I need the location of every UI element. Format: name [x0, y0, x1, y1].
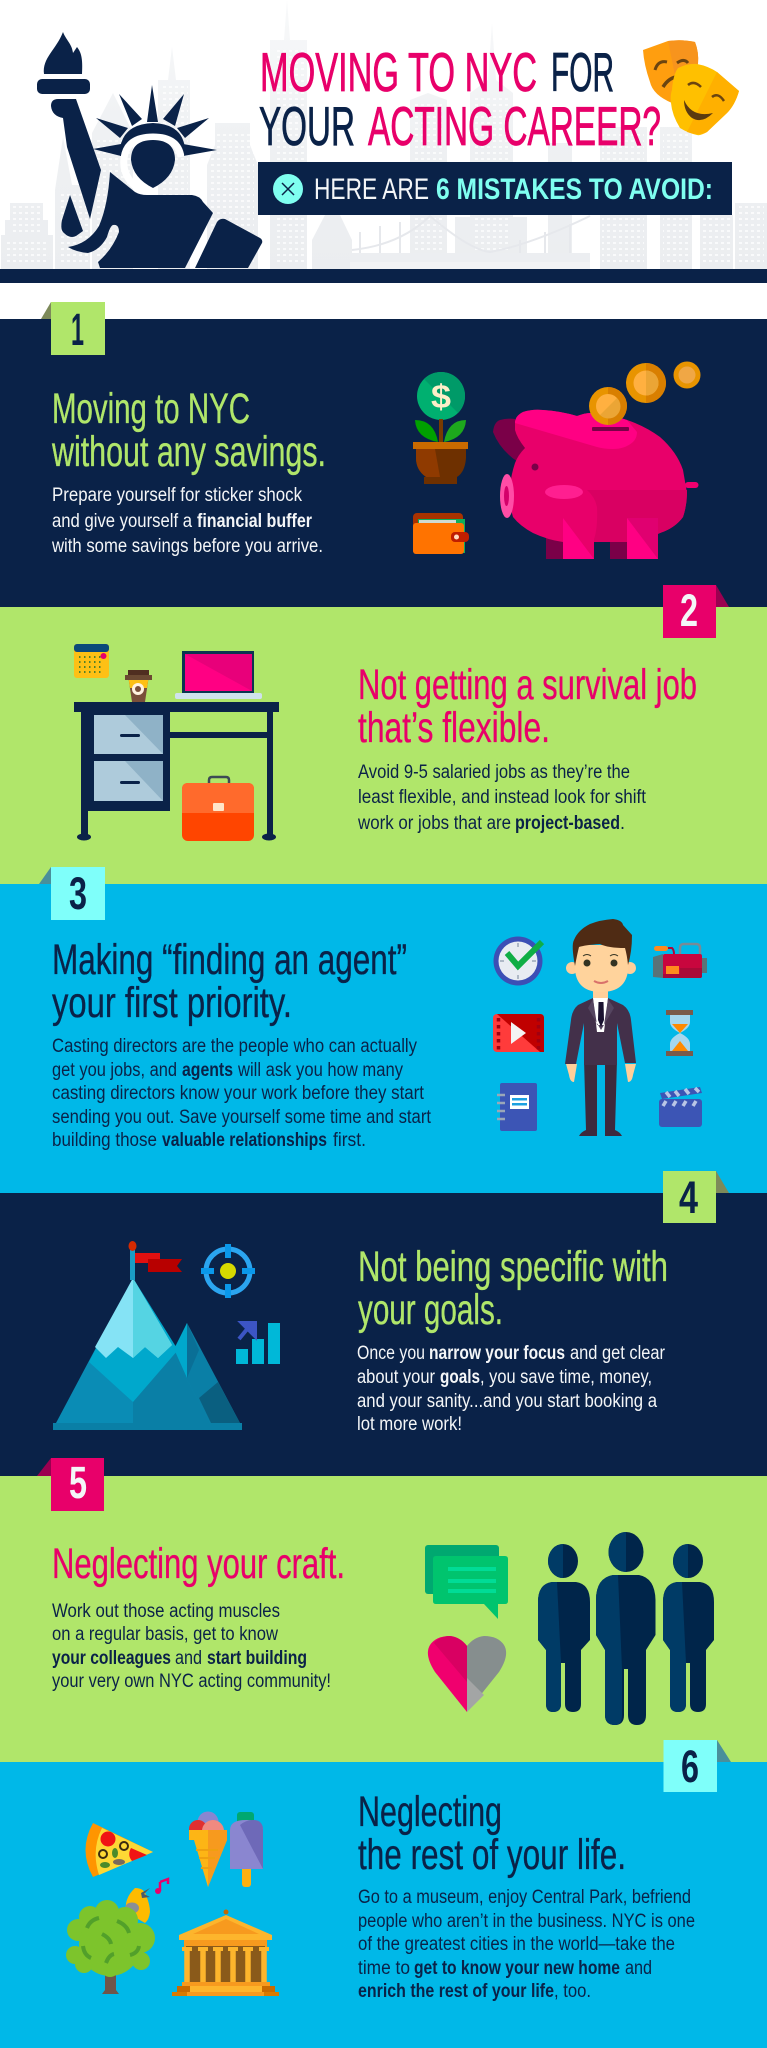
panel: mistake 4: [0, 1171, 767, 1476]
badge 1: 1: [71, 304, 84, 355]
badge 3: 3: [69, 868, 87, 919]
icon: briefcase: [182, 777, 254, 841]
badge 3: [39, 867, 105, 920]
body 3: get you jobs, and: [52, 1060, 177, 1081]
banner text: [314, 173, 713, 206]
badge 4: [663, 1171, 729, 1223]
title: YOUR: [259, 95, 355, 157]
body 6: people who aren’t in the business. NYC is one: [358, 1911, 695, 1932]
heading 1: Moving to NYC: [52, 385, 250, 433]
icon: money plant: $: [431, 378, 451, 415]
icon: ice cream cone: [189, 1812, 227, 1887]
icon: camera: [653, 944, 707, 978]
badge 6: 6: [681, 1741, 699, 1792]
body 5: on a regular basis, get to know: [52, 1624, 278, 1645]
body 3: first.: [333, 1130, 366, 1151]
icon: coffee cup: [125, 670, 152, 702]
banner text: 6 MISTAKES TO AVOID:: [436, 173, 713, 206]
statue of liberty: [37, 32, 262, 268]
body 2: least flexible, and instead look for shift: [358, 787, 647, 808]
heading 2: that’s flexible.: [358, 704, 550, 752]
body 4: [357, 1343, 666, 1435]
heading 4: [358, 1243, 668, 1334]
heading 3: [52, 936, 407, 1027]
icon: tree: [66, 1900, 155, 1994]
icon: clapperboard: [659, 1087, 702, 1127]
body 4: , you save time, money,: [480, 1367, 652, 1388]
icon: notebook: [497, 1083, 537, 1131]
heading 3: Making “finding an agent”: [52, 936, 407, 984]
body 4: Once you: [357, 1343, 425, 1364]
heading 2: [358, 661, 697, 752]
badge 5: 5: [69, 1457, 87, 1508]
body 3: [52, 1036, 432, 1151]
body 5: and: [175, 1648, 202, 1669]
title: [259, 41, 661, 157]
icon: video player: [493, 1014, 544, 1052]
icon: pizza slice: [86, 1823, 153, 1877]
badge 2: [663, 585, 729, 638]
icon: museum: [172, 1910, 279, 1996]
skyline: [1, 0, 767, 269]
heading 3: your first priority.: [52, 979, 292, 1027]
body 4: narrow your focus: [429, 1343, 565, 1364]
banner: [258, 162, 732, 215]
header bar: [0, 269, 767, 283]
body 1: with some savings before you arrive.: [51, 536, 323, 557]
icon: target: [201, 1244, 255, 1298]
body 6: of the greatest cities in the world—take the: [358, 1934, 675, 1955]
body 4: about your: [357, 1367, 436, 1388]
panel: mistake 6: [0, 1740, 767, 2048]
body 1: and give yourself a: [52, 511, 192, 532]
icon: desk: [74, 702, 279, 840]
body 3: sending you out. Save yourself some time and start: [52, 1107, 432, 1128]
body 2: work or jobs that are: [357, 813, 511, 834]
body 4: goals: [440, 1367, 480, 1388]
body 6: [358, 1887, 695, 2002]
body 3: building those: [52, 1130, 157, 1151]
body 3: Casting directors are the people who can actually: [52, 1036, 417, 1057]
icon: singing bird: [125, 1879, 168, 1923]
panel: mistake 5: [0, 1457, 767, 1762]
icon: heart: [428, 1636, 506, 1712]
heading 1: without any savings.: [51, 428, 326, 476]
body 2: [357, 762, 647, 834]
banner text: HERE ARE: [314, 173, 429, 206]
body 2: Avoid 9-5 salaried jobs as they’re the: [358, 762, 630, 783]
body 6: time to: [358, 1958, 410, 1979]
heading 6: the rest of your life.: [358, 1831, 626, 1879]
icon: clock with check: [494, 936, 542, 986]
header: [0, 0, 767, 284]
body 6: and: [625, 1958, 652, 1979]
body 4: and your sanity...and you start booking a: [357, 1391, 657, 1412]
icon: laptop: [175, 651, 262, 699]
icon: three people: [538, 1532, 714, 1725]
icon: theatre masks: [643, 40, 739, 135]
body 4: lot more work!: [357, 1414, 462, 1435]
body 3: casting directors know your work before they start: [52, 1083, 425, 1104]
icon: growth chart: [236, 1323, 280, 1364]
body 6: get to know your new home: [414, 1958, 620, 1979]
icon: x circle: [273, 174, 303, 204]
icon: chat bubbles: [425, 1545, 508, 1619]
body 1: Prepare yourself for sticker shock: [52, 485, 302, 506]
icon: mountain with flag: [53, 1241, 242, 1430]
body 3: agents: [182, 1060, 233, 1081]
icon: calendar: [74, 644, 109, 678]
body 3: valuable relationships: [162, 1130, 327, 1151]
body 5: start building: [207, 1648, 307, 1669]
body 5: your very own NYC acting community!: [52, 1671, 331, 1692]
icon: coins: [589, 362, 700, 425]
body 1: [51, 485, 323, 557]
body 6: enrich the rest of your life: [358, 1981, 554, 2002]
panel: mistake 1: [0, 302, 767, 607]
heading 6: [358, 1788, 626, 1879]
icon: money plant: [413, 372, 468, 484]
illustration: actor in suit: [565, 919, 636, 1136]
badge 6: [664, 1740, 731, 1792]
heading 6: Neglecting: [358, 1788, 502, 1836]
body 2: .: [620, 813, 625, 834]
body 6: , too.: [554, 1981, 591, 2002]
badge 1: [41, 302, 105, 355]
body 1: financial buffer: [197, 511, 313, 532]
panel: mistake 3: [0, 867, 767, 1193]
body 5: your colleagues: [52, 1648, 171, 1669]
heading 1: [51, 385, 326, 476]
body 2: project-based: [515, 813, 620, 834]
heading 4: your goals.: [358, 1286, 503, 1334]
title: FOR: [551, 41, 614, 103]
body 3: will ask you how many: [237, 1060, 403, 1081]
badge 4: 4: [679, 1172, 698, 1223]
icon: popsicle: [230, 1812, 263, 1887]
title: MOVING TO NYC: [260, 41, 537, 103]
icon: wallet: [413, 513, 469, 554]
badge 2: 2: [680, 585, 698, 636]
heading 5: Neglecting your craft.: [52, 1540, 345, 1588]
badge 5: [37, 1457, 104, 1511]
body 5: [52, 1601, 331, 1692]
panel: mistake 2: [0, 585, 767, 884]
icon: piggy bank: [493, 410, 698, 559]
body 5: Work out those acting muscles: [52, 1601, 280, 1622]
body 4: and get clear: [570, 1343, 666, 1364]
icon: hourglass: [666, 1010, 693, 1056]
body 6: Go to a museum, enjoy Central Park, befriend: [358, 1887, 691, 1908]
